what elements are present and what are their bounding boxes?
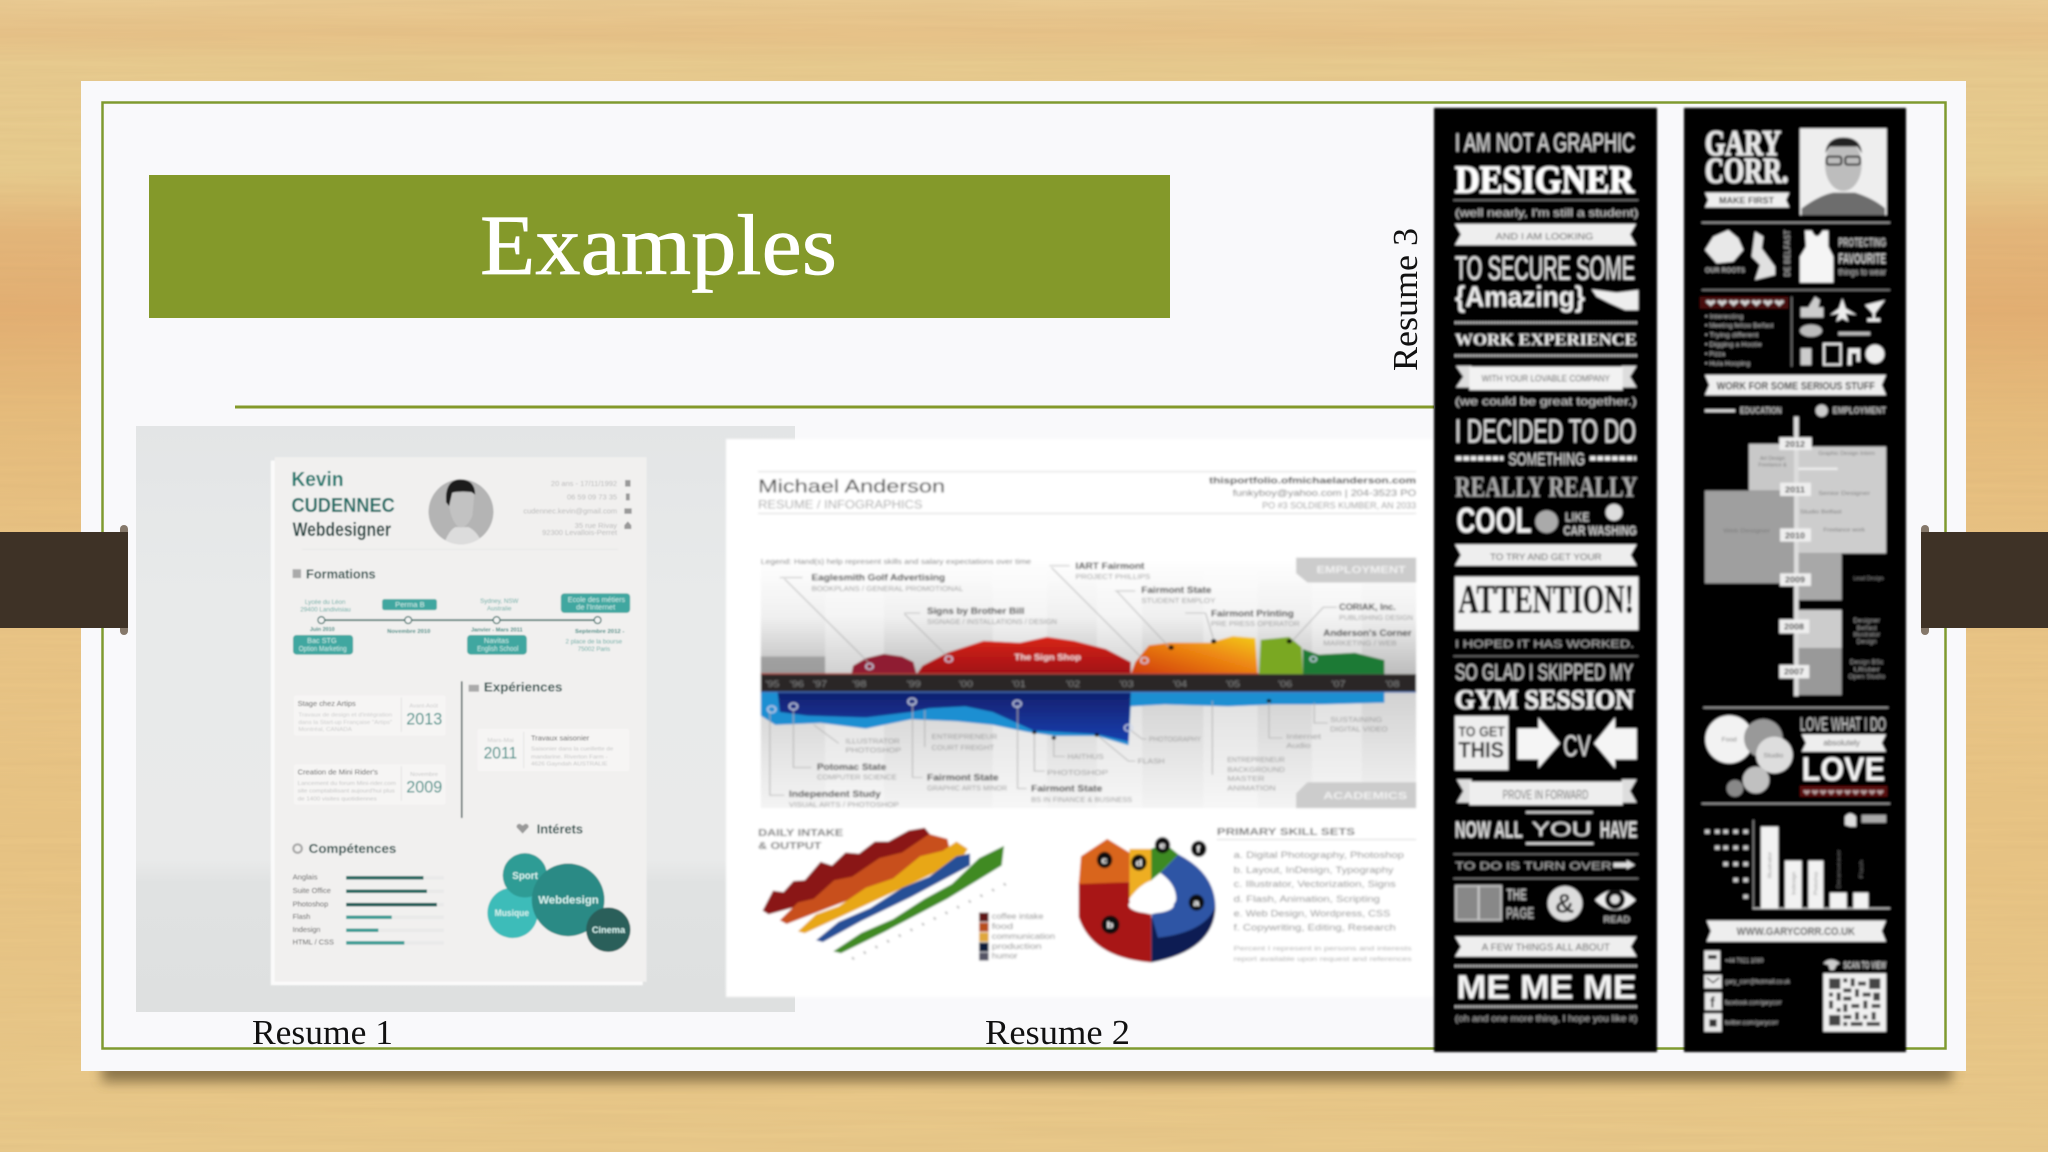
contact details: cudennec.kevin@gmail.com xyxy=(523,507,617,516)
education timeline: Lycée du Léon xyxy=(305,599,346,606)
skill donut chart: f xyxy=(1196,845,1201,855)
skill bars: Flash xyxy=(293,912,310,921)
resume 4 upper half: WORK FOR SOME SERIOUS STUFF xyxy=(1717,380,1875,392)
career timeline chart: '02 xyxy=(1066,680,1081,689)
career blocks continued: Design BSc xyxy=(1850,660,1883,666)
interest bubbles: Musique xyxy=(495,908,529,918)
career timeline chart: BOOKPLANS / GENERAL PROMOTIONAL xyxy=(812,584,963,593)
career timeline chart: MARKETING / WEB xyxy=(1323,639,1397,648)
tab: academics xyxy=(1296,782,1416,808)
career blocks continued: Illustrator xyxy=(1853,633,1880,639)
resume 3 lower half: A FEW THINGS ALL ABOUT xyxy=(1482,943,1610,954)
interest bubbles: Food xyxy=(1722,737,1737,744)
career blocks: 2009 xyxy=(1785,575,1805,585)
experience: 2009: Lancement du forum Mini-rider.com xyxy=(298,781,396,787)
resume 3 upper half: REALLY REALLY xyxy=(1455,473,1637,504)
resume 3 lower half: CV xyxy=(1563,730,1591,763)
career timeline chart: Audio xyxy=(1286,741,1311,750)
experience: 2009: site comptabilisant aujourd'hui plus xyxy=(298,788,395,794)
education timeline: Novembre 2010 xyxy=(387,629,430,635)
career timeline chart: '97 xyxy=(813,680,828,689)
experience: 2011: Mars-Mai xyxy=(487,738,514,744)
primary skill sets list: report available upon request and references xyxy=(1234,955,1412,963)
resume 3 upper half xyxy=(1453,130,1639,630)
career blocks continued xyxy=(1779,600,1886,696)
career blocks: 2010 xyxy=(1785,530,1805,540)
primary skill sets list: a. Digital Photography, Photoshop xyxy=(1234,851,1404,861)
tab: employment xyxy=(1296,558,1416,582)
resume 3 upper half: WITH YOUR LOVABLE COMPANY xyxy=(1482,374,1611,384)
education timeline: 2 place de la bourse xyxy=(565,638,622,645)
skills bar chart xyxy=(1705,820,1890,909)
caption: resume 2: Resume 2 xyxy=(985,1013,1130,1052)
primary skill sets list: f. Copywriting, Editing, Research xyxy=(1234,923,1396,933)
career timeline chart: COURT FREIGHT xyxy=(932,743,995,752)
caption: resume 1: Resume 1 xyxy=(252,1013,393,1052)
contact details: 20 ans - 17/11/1992 xyxy=(551,479,617,488)
contact list: twitter.com/garycorr xyxy=(1725,1019,1779,1026)
tab: academics: ACADEMICS xyxy=(1323,791,1407,802)
skill donut chart xyxy=(1079,837,1216,962)
resume 4 upper half: • Trying different xyxy=(1705,332,1758,339)
skill donut chart: d xyxy=(1136,859,1142,869)
contact details: 92300 Levallois-Perret xyxy=(542,528,617,537)
experience: 2009 xyxy=(294,764,446,805)
resume 4 lower half: LOVE xyxy=(1802,752,1885,789)
education timeline: Perma B xyxy=(395,602,425,609)
resume 3 lower half: I HOPED IT HAS WORKED. xyxy=(1455,638,1634,650)
career timeline chart: Potomac State xyxy=(817,763,887,773)
interest bubbles xyxy=(487,853,631,952)
career blocks xyxy=(1705,417,1886,600)
experience: 2013: 2013 xyxy=(406,710,442,729)
career timeline chart: '07 xyxy=(1331,680,1346,689)
career timeline chart: '99 xyxy=(907,680,921,689)
career timeline chart: SUSTAINING xyxy=(1330,715,1382,724)
heading: skills: Compétences xyxy=(309,841,396,856)
contact list: gary_corr@hotmail.co.uk xyxy=(1725,978,1791,985)
interest bubbles: Cinema xyxy=(592,925,626,935)
experience: 2011 xyxy=(477,729,629,771)
primary skill sets list: b. Layout, InDesign, Typography xyxy=(1234,866,1394,876)
header: thisportfolio.ofmichaelanderson.com xyxy=(1209,475,1416,486)
career timeline chart: DIGITAL VIDEO xyxy=(1330,724,1388,733)
experience: 2011: Saisonier dans la cueillette de xyxy=(531,747,613,753)
title banner xyxy=(149,175,1170,318)
resume 3 upper half: TO TRY AND GET YOUR xyxy=(1490,552,1602,562)
education timeline: Sydney, NSW xyxy=(480,598,519,605)
contact list: facebook.com/garycorr xyxy=(1725,999,1782,1006)
career blocks: Senior Designer xyxy=(1818,491,1870,497)
resume 3 upper half: LIKE xyxy=(1565,510,1589,525)
resume 3 lower half: NOW ALL xyxy=(1455,816,1523,842)
resume 3 upper half: SOMETHING xyxy=(1508,449,1585,469)
career timeline chart: ANIMATION xyxy=(1227,784,1276,793)
career blocks continued: Ulster xyxy=(1853,667,1880,673)
education timeline: 75002 Paris xyxy=(578,646,611,653)
skill donut chart: b xyxy=(1107,921,1113,931)
primary skill sets list xyxy=(1217,827,1416,963)
resume 4 lower half: absolutely xyxy=(1823,739,1860,748)
contact details: 35 rue Rivay xyxy=(575,521,617,530)
resume 3 upper half: COOL xyxy=(1457,502,1532,541)
career timeline chart: PROJECT PHILLIPS xyxy=(1076,572,1150,581)
resume 3 lower half: PROVE IN FORWARD xyxy=(1503,788,1588,802)
career timeline chart: '08 xyxy=(1385,680,1400,689)
career timeline chart: The Sign Shop xyxy=(1014,653,1081,662)
career timeline chart: COMPUTER SCIENCE xyxy=(817,773,897,781)
career timeline chart: '04 xyxy=(1173,680,1188,689)
skills bar chart: Indesign xyxy=(1791,872,1797,895)
resume 4 upper half: OUR ROOTS xyxy=(1705,266,1745,275)
resume 4 lower half: SCAN TO VIEW xyxy=(1843,960,1886,971)
career timeline chart: STUDENT EMPLOY xyxy=(1141,596,1216,605)
experience: 2011: Travaux saisonier xyxy=(531,733,590,742)
career timeline chart: Legend: Hand(s) help represent skills and salary expectations over time xyxy=(761,558,1032,566)
name block xyxy=(291,468,395,541)
skills bar chart: Dreamweaver xyxy=(1836,850,1842,888)
resume 3 upper half: (well nearly, I'm still a student) xyxy=(1455,208,1639,220)
white slide panel xyxy=(81,81,1966,1071)
career blocks: Studio Belfast xyxy=(1800,509,1842,515)
education timeline: Navitas xyxy=(484,638,509,645)
resume 3 upper half: {Amazing} xyxy=(1455,282,1585,314)
career timeline chart: '96 xyxy=(790,680,804,689)
panel: resume 1 xyxy=(271,457,647,985)
experience: 2013: Travaux de design et d'intégration xyxy=(298,713,392,719)
interest bubbles: Studio xyxy=(1763,752,1784,759)
skills bar chart: Flash xyxy=(1859,860,1865,878)
education timeline: 29400 Landivisiau xyxy=(300,606,351,613)
resume 4 upper half: MAKE FIRST xyxy=(1719,195,1774,205)
skills bar chart: Photoshop xyxy=(1814,872,1820,895)
QR code xyxy=(1823,973,1886,1032)
header: funkyboy@yahoo.com | 204-3523 PO xyxy=(1233,488,1416,499)
experience: 2013: Stage chez Artips xyxy=(298,699,356,708)
resume 3 lower half: TO DO IS TURN OVER xyxy=(1455,860,1612,872)
daily intake ribbon chart: humor xyxy=(992,952,1018,961)
left strap xyxy=(0,525,128,635)
career timeline chart: Fairmont State xyxy=(1141,586,1212,596)
career blocks: Art Design xyxy=(1760,456,1785,462)
title: Examples xyxy=(480,197,837,293)
resume 4 upper half: DE BELFAST xyxy=(1783,230,1792,277)
resume 4 upper half: ♥♥♥♥♥♥♥ xyxy=(1705,298,1785,310)
career blocks: Web Designer xyxy=(1723,529,1770,535)
name block: Kevin xyxy=(291,468,344,491)
heading: interests xyxy=(516,821,583,836)
daily intake ribbon chart: DAILY INTAKE xyxy=(758,828,843,839)
resume 4 upper half: • Interesting xyxy=(1705,313,1744,320)
career timeline chart: '98 xyxy=(852,680,867,689)
career timeline chart: IART Fairmont xyxy=(1076,562,1145,571)
resume 3 upper half: WORK EXPERIENCE xyxy=(1455,330,1637,349)
resume 4 lower half xyxy=(1702,600,1890,1032)
experience: 2013 xyxy=(294,696,446,736)
resume 3 upper half: AND I AM LOOKING xyxy=(1496,231,1593,241)
skills bar chart: Illustrator xyxy=(1768,852,1774,878)
title underline xyxy=(235,406,1434,408)
primary skill sets list: c. Illustrator, Vectorization, Signs xyxy=(1234,880,1396,890)
contact details xyxy=(523,479,632,537)
resume 3 lower half: & xyxy=(1555,889,1574,919)
header: RESUME / INFOGRAPHICS xyxy=(758,498,923,511)
career timeline chart: '95 xyxy=(765,680,780,689)
experience: 2009: 2009 xyxy=(406,778,442,797)
resume 3 lower half: PAGE xyxy=(1506,905,1534,922)
education timeline: Septembre 2012 - xyxy=(575,629,624,635)
career timeline chart: BS IN FINANCE & BUSINESS xyxy=(1031,795,1132,804)
resume 3 lower half: THIS xyxy=(1458,738,1504,763)
resume 3 upper half: TO SECURE SOME xyxy=(1455,250,1635,287)
daily intake ribbon chart: communication xyxy=(992,932,1055,942)
header: PO #3 SOLDIERS KUMBER, AN 2033 xyxy=(1262,501,1417,511)
resume 4 lower half: LOVE WHAT I DO xyxy=(1800,714,1886,735)
career timeline chart: GRAPHIC ARTS MINOR xyxy=(927,784,1007,793)
name block: CUDENNEC xyxy=(291,494,395,517)
career timeline chart: Anderson's Corner xyxy=(1323,629,1412,639)
primary skill sets list: e. Web Design, Wordpress, CSS xyxy=(1234,909,1390,919)
career timeline chart: ILLUSTRATOR xyxy=(845,736,900,745)
daily intake ribbon chart xyxy=(758,828,1055,961)
resume 3 lower half: ME ME ME xyxy=(1457,969,1637,1006)
heading: experiences: Expériences xyxy=(484,679,562,694)
resume 3 lower half: THE xyxy=(1507,887,1527,904)
resume 4 upper half: PROTECTING xyxy=(1838,236,1886,250)
career timeline chart: Signs by Brother Bill xyxy=(927,607,1025,617)
panel: resume 2 xyxy=(726,439,1434,997)
career timeline chart: PHOTOSHOP xyxy=(1047,768,1108,777)
slide drop shadow xyxy=(102,1058,1952,1082)
career blocks continued: Designer xyxy=(1853,619,1880,625)
resume 4 upper half: GARY xyxy=(1705,123,1781,163)
resume 4 upper half: • Pizza xyxy=(1705,351,1725,358)
portrait xyxy=(1800,128,1887,215)
resume 4 upper half: • Digging a Hootie xyxy=(1705,342,1762,349)
career timeline chart: MASTER xyxy=(1227,774,1264,783)
header xyxy=(758,471,1417,514)
education timeline: English School xyxy=(477,646,519,653)
education timeline: Ecole des métiers xyxy=(568,597,626,604)
career timeline chart: Eaglesmith Golf Advertising xyxy=(812,573,945,583)
career timeline chart: '05 xyxy=(1226,680,1241,689)
experience: 2013: dans la Start-up Française "Artips" xyxy=(298,720,392,726)
career timeline chart: '00 xyxy=(959,680,973,689)
panel: resume 3 xyxy=(1434,108,1657,1052)
resume 3 lower half: GYM SESSION xyxy=(1455,684,1634,714)
career timeline chart: BACKGROUND xyxy=(1227,765,1285,774)
career timeline chart: PUBLISHING DESIGN xyxy=(1339,613,1413,622)
career timeline chart: '03 xyxy=(1119,680,1134,689)
resume 3 upper half: I DECIDED TO DO xyxy=(1455,414,1636,451)
education timeline xyxy=(293,593,630,655)
experience: 2011: 4626 Gayndah AUSTRALIE xyxy=(531,762,608,768)
career timeline chart: HAITHUS xyxy=(1067,752,1104,761)
career timeline chart: CORIAK, Inc. xyxy=(1339,603,1396,613)
resume 4 upper half: things to wear xyxy=(1838,267,1886,277)
green slide frame xyxy=(102,102,1946,1048)
contact list xyxy=(1704,951,1791,1032)
education timeline: de l'Internet xyxy=(576,604,615,611)
experience: 2013: Montréal, CANADA xyxy=(298,727,352,733)
experience: 2009: de 1400 visites quotidiennes xyxy=(298,796,377,802)
panel: resume 4 xyxy=(1684,108,1906,1052)
resume 4 upper half: CORR. xyxy=(1705,151,1788,191)
career timeline chart: '01 xyxy=(1012,680,1026,689)
resume 4 upper half: EMPLOYMENT xyxy=(1833,405,1886,415)
resume 3 lower half: READ xyxy=(1603,915,1630,925)
heading: formations: Formations xyxy=(306,566,376,581)
experience: 2013: Avant-Août xyxy=(409,703,438,709)
daily intake ribbon chart: production xyxy=(992,942,1042,952)
primary skill sets list: Percent I represent in persons and interests xyxy=(1234,944,1412,952)
career timeline chart: Fairmont State xyxy=(1031,784,1103,794)
contact details: 06 59 09 73 35 xyxy=(567,493,617,502)
resume 3 lower half: TO GET xyxy=(1458,724,1505,741)
primary skill sets list: d. Flash, Animation, Scripting xyxy=(1234,895,1380,904)
skill bars: Suite Office xyxy=(293,886,331,895)
resume 3 upper half: ATTENTION! xyxy=(1458,577,1634,622)
skill donut chart: e xyxy=(1159,841,1166,851)
experience: 2011: 2011 xyxy=(484,744,517,763)
career blocks continued: 2007 xyxy=(1784,667,1804,677)
resume 1 background xyxy=(136,426,795,1012)
name block: Webdesigner xyxy=(293,520,391,541)
career timeline chart: PHOTOGRAPHY xyxy=(1149,734,1201,743)
right strap xyxy=(1921,525,2048,635)
skill bars: Anglais xyxy=(293,873,318,882)
career timeline chart: Independent Study xyxy=(789,790,881,800)
career blocks continued: Belfast xyxy=(1857,626,1877,632)
career blocks continued: Design xyxy=(1857,639,1877,645)
portrait xyxy=(428,479,494,550)
resume 3 lower half: HAVE xyxy=(1600,816,1637,842)
resume 3 lower half: YOU xyxy=(1532,818,1592,841)
resume 4 upper half: • Hula Hooping xyxy=(1705,361,1750,368)
daily intake ribbon chart: & OUTPUT xyxy=(758,841,822,852)
skill donut chart: a xyxy=(1193,899,1200,909)
interest bubbles xyxy=(1705,715,1793,797)
daily intake ribbon chart: food xyxy=(992,922,1013,932)
primary skill sets list: PRIMARY SKILL SETS xyxy=(1217,827,1355,838)
career timeline chart xyxy=(761,558,1416,809)
education timeline: Australie xyxy=(487,606,512,613)
career timeline chart: FLASH xyxy=(1138,757,1165,766)
education timeline: Option Marketing xyxy=(299,646,347,653)
education timeline: Bac STG xyxy=(307,638,337,645)
resume 3 lower half: SO GLAD I SKIPPED MY xyxy=(1455,659,1634,685)
resume 4 upper half xyxy=(1700,123,1890,600)
skill bars: Indesign xyxy=(293,925,321,934)
interest bubbles: Webdesign xyxy=(538,894,599,906)
resume 3 lower half: (oh and one more thing, I hope you like it) xyxy=(1455,1014,1637,1024)
skill bars: Photoshop xyxy=(293,899,328,908)
career timeline chart: Fairmont State xyxy=(927,773,999,783)
education timeline: Juin 2010 xyxy=(310,627,335,633)
career timeline chart: Fairmont Printing xyxy=(1211,609,1294,619)
experience: 2009: Novembre xyxy=(410,772,438,778)
career blocks: Lead Design xyxy=(1853,576,1883,582)
education timeline: Janvier - Mars 2011 xyxy=(471,628,523,634)
caption: resume 3: Resume 3 xyxy=(1386,228,1425,371)
career timeline chart: PHOTOSHOP xyxy=(845,745,901,754)
resume 4 upper half: FAVOURITE xyxy=(1838,250,1886,267)
career blocks: Graphic Design Intern xyxy=(1818,451,1875,457)
career blocks: Freelance & xyxy=(1758,463,1787,469)
resume 4 upper half: • Meeting fellow Belfast xyxy=(1705,323,1773,330)
career blocks: 2011 xyxy=(1785,485,1805,495)
career timeline chart: '06 xyxy=(1278,680,1293,689)
skill donut chart: c xyxy=(1101,856,1108,866)
career timeline chart: Internet xyxy=(1286,732,1322,741)
experience: 2011: mandarine. Riverton Farm - xyxy=(531,754,608,760)
career blocks continued: Open Studio xyxy=(1848,675,1886,681)
career blocks: 2012 xyxy=(1785,439,1805,449)
contact list: f xyxy=(1710,995,1715,1011)
resume 3 upper half: CAR WASHING xyxy=(1563,523,1637,538)
heading: interests: Intérets xyxy=(537,821,583,836)
resume 4 lower half: ♥♥♥♥♥♥♥♥♥♥ xyxy=(1803,787,1884,797)
experience: 2009: Creation de Mini Rider's xyxy=(298,768,378,777)
career timeline chart: ENTREPRENEUR xyxy=(1227,755,1285,764)
resume 3 upper half: (we could be great together.) xyxy=(1455,396,1637,408)
skill bars xyxy=(293,873,444,947)
resume 1 page xyxy=(271,457,647,985)
resume 3 upper half: I AM NOT A GRAPHIC xyxy=(1455,130,1635,158)
interest bubbles: Sport xyxy=(512,871,539,882)
resume 4 upper half: EDUCATION xyxy=(1740,405,1782,415)
resume 3 upper half: DESIGNER xyxy=(1455,158,1635,202)
career blocks: Freelance work xyxy=(1823,528,1865,534)
skill bars: HTML / CSS xyxy=(293,938,334,947)
tab: employment: EMPLOYMENT xyxy=(1317,565,1406,576)
contact list: +44 7921 1080 xyxy=(1725,958,1764,965)
resume 3 lower half xyxy=(1453,638,1638,1024)
career timeline chart: SIGNAGE / INSTALLATIONS / DESIGN xyxy=(927,617,1057,626)
career timeline chart: VISUAL ARTS / PHOTOSHOP xyxy=(789,800,899,809)
icon: hobbies xyxy=(1800,297,1885,365)
daily intake ribbon chart: coffee intake xyxy=(992,912,1043,922)
career timeline chart: ENTREPRENEUR xyxy=(932,732,997,741)
header: Michael Anderson xyxy=(758,476,945,497)
resume 4 lower half: WWW.GARYCORR.CO.UK xyxy=(1737,926,1855,938)
career timeline chart: PRE PRESS OPERATOR xyxy=(1211,619,1300,628)
career blocks continued: 2008 xyxy=(1784,621,1804,631)
